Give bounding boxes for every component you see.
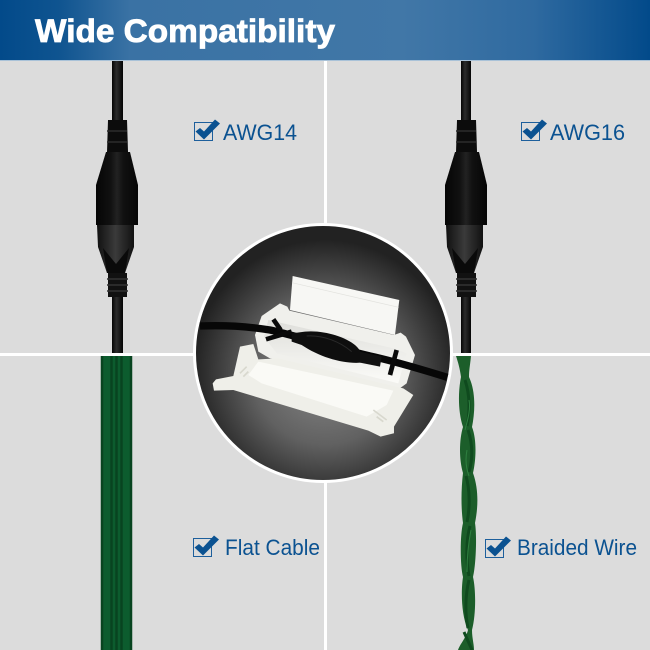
black cord — [200, 326, 447, 377]
label: AWG14: AWG14 — [223, 120, 297, 145]
lower shell — [213, 344, 413, 437]
check icon — [522, 120, 547, 140]
label: Flat Cable: Flat Cable — [225, 535, 320, 560]
box lid — [290, 276, 399, 335]
label: AWG16 — [522, 120, 625, 145]
label: Braided Wire: Braided Wire — [517, 535, 637, 560]
cable ties — [266, 319, 397, 375]
check icon — [194, 536, 219, 556]
green braided wire — [456, 356, 477, 650]
black cable with connector: AWG16 — [445, 61, 487, 353]
title: Wide Compatibility — [35, 13, 335, 49]
header banner — [0, 0, 650, 61]
label: AWG14 — [194, 120, 297, 145]
check icon — [486, 536, 511, 558]
upper shell — [255, 303, 415, 391]
check icon — [194, 120, 220, 140]
center photo: open junction box — [194, 224, 452, 482]
label: AWG16: AWG16 — [550, 120, 625, 145]
black cable with connector: AWG14 — [96, 61, 138, 353]
green flat cable — [101, 356, 132, 650]
